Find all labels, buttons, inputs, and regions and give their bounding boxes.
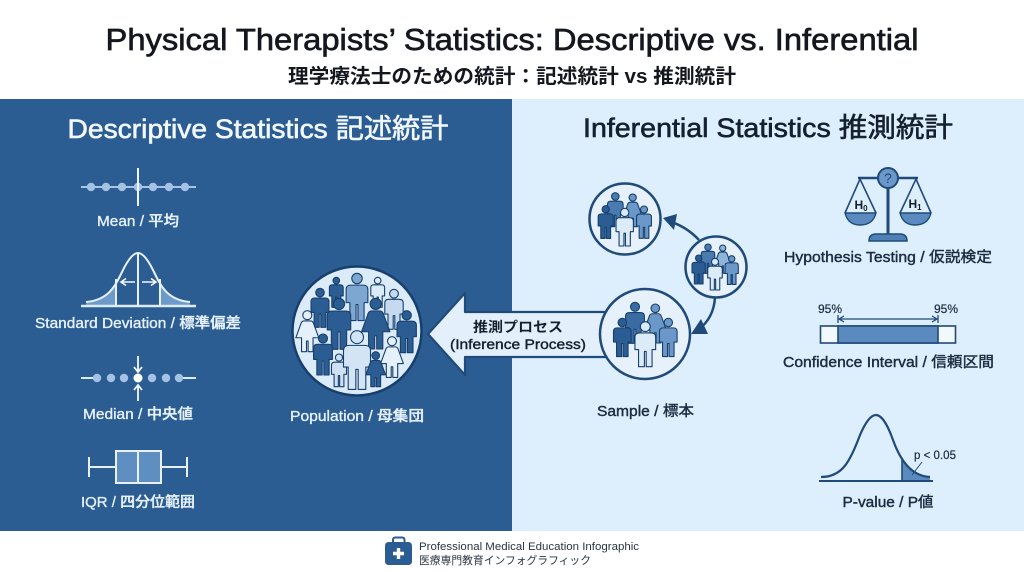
icon: sample circle top <box>590 184 660 254</box>
chart: p-value curve <box>819 415 956 481</box>
footer text: 医療専門教育インフォグラフィック <box>419 553 591 567</box>
arrow: resampling curve upper <box>663 214 699 240</box>
icon: confidence interval bar <box>818 302 958 343</box>
icon: hypothesis testing scale: H <box>908 197 917 211</box>
title: Physical Therapists’ Statistics: Descriptive vs. Inferential <box>106 22 918 57</box>
label: sample: Sample / 標本 <box>597 403 695 420</box>
arrow label: inference process: (Inference Process) <box>450 336 586 352</box>
label: hypothesis testing: Hypothesis Testing / 仮説検定 <box>784 249 992 266</box>
icon: hypothesis testing scale: 1 <box>917 203 922 212</box>
footer text <box>419 541 640 567</box>
icon: confidence interval bar: 95% <box>934 302 958 316</box>
icon: sample circle middle <box>686 236 746 298</box>
arrow: resampling curve lower <box>691 297 715 334</box>
icon: hypothesis testing scale: ? <box>884 170 892 186</box>
panel: inferential statistics <box>512 99 1024 531</box>
icon: standard deviation bell curve <box>81 253 196 306</box>
heading: inferential: Inferential Statistics 推測統計 <box>583 113 953 143</box>
icon: mean dot plot <box>81 168 196 206</box>
icon: population circle <box>292 266 422 396</box>
heading: descriptive: Descriptive Statistics 記述統計 <box>68 114 448 144</box>
label: confidence interval: Confidence Interval / 信頼区間 <box>783 354 994 371</box>
footer <box>385 538 640 567</box>
icon: confidence interval bar: 95% <box>818 302 842 316</box>
arrow label: inference process: 推測プロセス <box>473 319 563 335</box>
panel: descriptive statistics <box>0 99 512 531</box>
label: standard deviation: Standard Deviation / 標準偏差 <box>35 315 241 332</box>
label: mean: Mean / 平均 <box>97 213 179 230</box>
arrow: inference process <box>428 293 610 375</box>
label: p-value: P-value / P値 <box>842 494 934 511</box>
label: median: Median / 中央値 <box>83 406 193 423</box>
subtitle: 理学療法士のための統計：記述統計 vs 推測統計 <box>288 65 736 88</box>
icon: hypothesis testing scale: H <box>854 198 863 212</box>
icon: hypothesis testing scale <box>845 168 931 241</box>
icon: sample circle large <box>600 289 690 379</box>
icon: median dot plot <box>81 356 196 401</box>
label: population: Population / 母集団 <box>290 408 424 425</box>
footer text: Professional Medical Education Infographic <box>419 541 640 553</box>
arrow label: inference process <box>450 319 586 352</box>
label: IQR: IQR / 四分位範囲 <box>81 493 195 511</box>
chart: p-value curve: p < 0.05 <box>914 448 956 462</box>
icon: IQR box plot <box>89 451 187 483</box>
icon: medical briefcase <box>385 538 412 565</box>
icon: hypothesis testing scale: 0 <box>863 204 868 213</box>
